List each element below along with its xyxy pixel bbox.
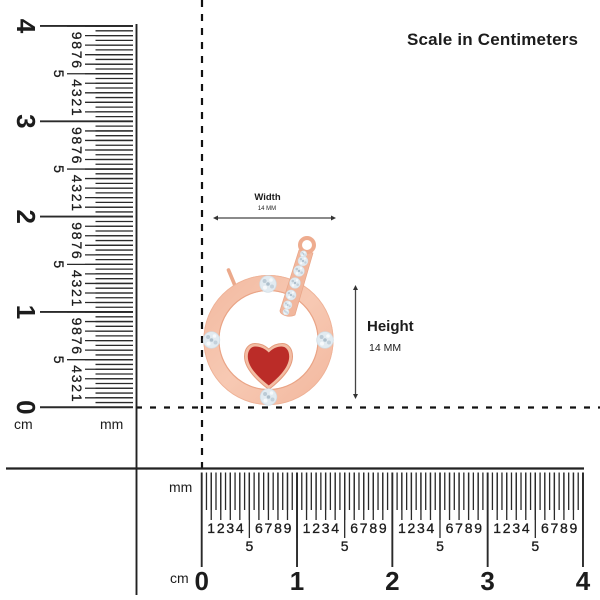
width arrow	[213, 216, 336, 220]
horizontal ruler millimeter digits: 2	[503, 520, 511, 536]
dashed origin lines	[136, 0, 600, 468]
ring diamonds	[203, 276, 333, 348]
horizontal ruler millimeter digits: 1	[398, 520, 406, 536]
title: Scale in Centimeters	[407, 30, 578, 49]
vertical ruler millimeter digits: 6	[69, 156, 85, 164]
vertical ruler millimeter digits: 8	[69, 327, 85, 335]
horizontal ruler millimeter digits: 5	[246, 538, 254, 554]
horizontal ruler millimeter digits: 6	[541, 520, 549, 536]
height dimension	[353, 285, 414, 399]
horizontal ruler millimeter digits: 5	[341, 538, 349, 554]
horizontal ruler millimeter digits: 8	[560, 520, 568, 536]
horizontal ruler millimeter digits: 4	[427, 520, 435, 536]
vertical ruler millimeter digits: 5	[51, 165, 67, 173]
horizontal ruler unit labels	[169, 479, 192, 586]
horizontal ruler millimeter digits: 5	[531, 538, 539, 554]
horizontal ruler millimeter digits: 7	[265, 520, 273, 536]
vertical ruler millimeter digits: 8	[69, 232, 85, 240]
horizontal ruler millimeter digits: 8	[369, 520, 377, 536]
vertical ruler unit labels: mm	[100, 416, 123, 432]
horizontal ruler unit labels: cm	[170, 570, 189, 586]
vertical ruler	[11, 19, 136, 595]
horizontal ruler millimeter digits: 1	[303, 520, 311, 536]
horizontal ruler millimeter digits: 1	[493, 520, 501, 536]
vertical ruler millimeter digits: 3	[69, 184, 85, 192]
bail diamonds	[283, 251, 308, 315]
horizontal ruler millimeter digits: 7	[360, 520, 368, 536]
vertical ruler millimeter digits: 4	[69, 270, 85, 278]
vertical ruler unit labels	[14, 416, 123, 432]
bottom diamond	[260, 389, 277, 405]
vertical ruler centimeter digits: 2	[11, 209, 41, 224]
vertical ruler millimeter digits: 5	[51, 356, 67, 364]
ring	[204, 275, 333, 405]
vertical ruler millimeter digits: 2	[69, 194, 85, 202]
vertical ruler millimeter digits: 3	[69, 89, 85, 97]
vertical ruler centimeter digits: 0	[11, 400, 41, 415]
vertical ruler millimeter digits: 7	[69, 337, 85, 345]
vertical ruler millimeter digits: 7	[69, 51, 85, 59]
vertical ruler millimeter digits: 9	[69, 222, 85, 230]
horizontal ruler millimeter digits: 3	[322, 520, 330, 536]
horizontal ruler unit labels: mm	[169, 479, 192, 495]
width label: Width	[254, 192, 281, 203]
height arrow	[353, 285, 358, 399]
vertical ruler millimeter digits: 3	[69, 375, 85, 383]
horizontal ruler centimeter digits: 0	[194, 566, 209, 596]
horizontal ruler millimeter digits: 2	[217, 520, 225, 536]
horizontal ruler millimeter digits: 9	[474, 520, 482, 536]
vertical ruler centimeter digits: 1	[11, 305, 41, 319]
horizontal ruler millimeter digits: 4	[522, 520, 530, 536]
vertical ruler millimeter digits: 1	[69, 108, 85, 116]
horizontal ruler millimeter digits: 1	[207, 520, 215, 536]
vertical ruler centimeter digits: 3	[11, 114, 41, 129]
vertical ruler millimeter digits: 1	[69, 203, 85, 211]
vertical ruler millimeter digits: 5	[51, 260, 67, 268]
vertical ruler millimeter digits: 8	[69, 137, 85, 145]
horizontal ruler millimeter digits: 7	[551, 520, 559, 536]
height label: Height	[367, 318, 414, 335]
horizontal ruler millimeter digits: 3	[512, 520, 520, 536]
horizontal ruler ticks	[6, 468, 584, 520]
vertical ruler millimeter digits: 1	[69, 394, 85, 402]
horizontal ruler millimeter digits: 4	[331, 520, 339, 536]
vertical ruler millimeter digits: 6	[69, 251, 85, 259]
vertical ruler millimeter digits: 3	[69, 280, 85, 288]
horizontal ruler millimeter digits: 9	[379, 520, 387, 536]
bail bar	[280, 250, 313, 316]
vertical ruler unit labels: cm	[14, 416, 33, 432]
vertical ruler millimeter digits: 9	[69, 127, 85, 135]
pendant	[203, 238, 333, 405]
width dimension	[213, 192, 336, 220]
vertical ruler millimeter digits: 6	[69, 60, 85, 68]
heart	[244, 344, 292, 390]
horizontal ruler	[6, 468, 591, 596]
height value: 14 MM	[369, 342, 401, 354]
horizontal ruler millimeter digits: 7	[455, 520, 463, 536]
left jump stem	[228, 270, 236, 288]
horizontal ruler centimeter digits: 4	[576, 566, 591, 596]
bail loop	[300, 238, 314, 252]
horizontal ruler millimeter digits: 2	[312, 520, 320, 536]
vertical ruler millimeter digits	[51, 32, 85, 402]
vertical ruler centimeter digits: 4	[11, 19, 41, 34]
vertical ruler millimeter digits: 4	[69, 79, 85, 87]
vertical ruler millimeter digits: 5	[51, 70, 67, 78]
vertical ruler millimeter digits: 4	[69, 365, 85, 373]
horizontal ruler millimeter digits: 5	[436, 538, 444, 554]
horizontal ruler centimeter digits: 3	[480, 566, 495, 596]
horizontal ruler millimeter digits: 6	[446, 520, 454, 536]
horizontal ruler centimeter digits: 1	[290, 566, 304, 596]
horizontal ruler millimeter digits: 8	[274, 520, 282, 536]
vertical ruler millimeter digits: 2	[69, 98, 85, 106]
horizontal ruler millimeter digits: 8	[465, 520, 473, 536]
horizontal ruler centimeter digits: 2	[385, 566, 400, 596]
vertical ruler millimeter digits: 4	[69, 175, 85, 183]
horizontal ruler millimeter digits: 3	[417, 520, 425, 536]
horizontal ruler millimeter digits: 4	[236, 520, 244, 536]
vertical ruler ticks	[86, 24, 136, 595]
vertical ruler millimeter digits: 2	[69, 289, 85, 297]
horizontal ruler millimeter digits: 3	[226, 520, 234, 536]
vertical ruler millimeter digits: 9	[69, 318, 85, 326]
horizontal ruler millimeter digits: 9	[284, 520, 292, 536]
horizontal ruler millimeter digits: 6	[350, 520, 358, 536]
vertical ruler millimeter digits: 2	[69, 384, 85, 392]
width value: 14 MM	[258, 206, 276, 212]
vertical ruler millimeter digits: 7	[69, 241, 85, 249]
vertical ruler millimeter digits: 6	[69, 346, 85, 354]
horizontal ruler millimeter digits	[207, 520, 578, 554]
horizontal ruler millimeter digits: 9	[570, 520, 578, 536]
horizontal ruler millimeter digits: 6	[255, 520, 263, 536]
vertical ruler millimeter digits: 9	[69, 32, 85, 40]
horizontal ruler millimeter digits: 2	[408, 520, 416, 536]
vertical ruler millimeter digits: 8	[69, 41, 85, 49]
vertical ruler millimeter digits: 7	[69, 146, 85, 154]
vertical ruler centimeter digits	[11, 19, 41, 415]
horizontal ruler centimeter digits	[194, 566, 591, 596]
vertical ruler millimeter digits: 1	[69, 299, 85, 307]
